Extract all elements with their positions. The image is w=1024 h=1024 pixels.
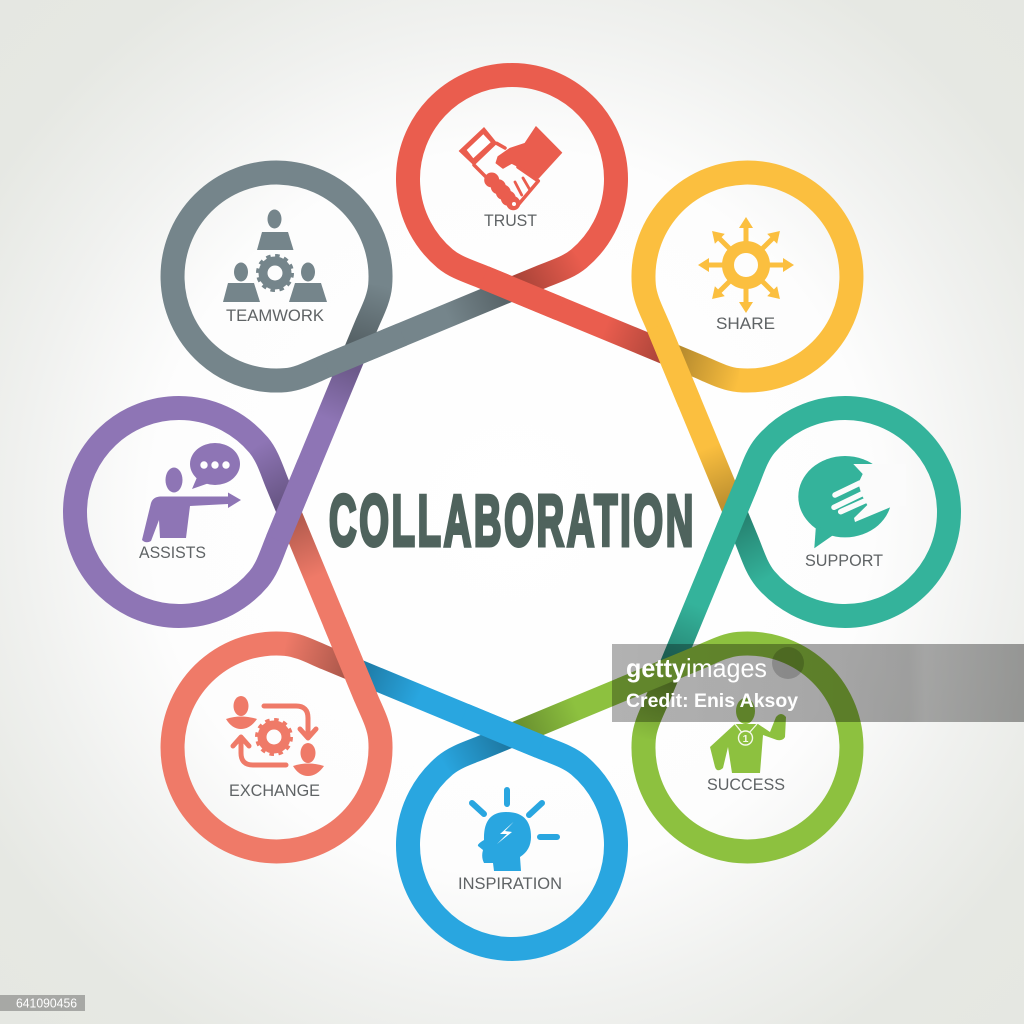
label: share: SHARE (716, 315, 775, 333)
ribbon: trust (red) (408, 75, 670, 354)
icon: winner with medal (710, 698, 786, 773)
label: exchange: EXCHANGE (229, 782, 320, 800)
icon: exchange people and gear (226, 696, 324, 776)
ribbon: share (yellow) (550, 129, 933, 512)
icon: share arrows (698, 217, 794, 313)
image id badge: 641090456 (16, 996, 77, 1010)
title: COLLABORATION (329, 482, 696, 562)
icon: inspired head (472, 790, 557, 871)
ribbon: inspiration (blue) (354, 670, 616, 949)
watermark bar (612, 644, 1024, 722)
icon: handshake (459, 127, 562, 210)
label: assists: ASSISTS (139, 544, 206, 562)
label: trust: TRUST (484, 212, 537, 230)
ribbon: success (green) (512, 550, 895, 933)
label: inspiration: INSPIRATION (458, 875, 562, 893)
label: teamwork: TEAMWORK (226, 307, 324, 325)
label: success: SUCCESS (707, 776, 785, 794)
icon: support bubble and hand (798, 456, 906, 548)
ribbon: assists (purple) (75, 354, 354, 616)
ribbon crossings: over-passing segments (277, 277, 747, 747)
watermark bar: Credit: Enis Aksoy (626, 691, 798, 712)
ribbon: support (teal) (670, 408, 949, 670)
watermark bar: gettyimages (626, 653, 767, 683)
ribbon: exchange (salmon) (91, 512, 474, 895)
label: support: SUPPORT (805, 552, 883, 570)
icon: winner with medal: 1 (743, 733, 749, 745)
icon: team with gear (223, 210, 327, 302)
ribbon: teamwork (gray) (129, 91, 512, 474)
icon: assisting person (142, 443, 241, 542)
